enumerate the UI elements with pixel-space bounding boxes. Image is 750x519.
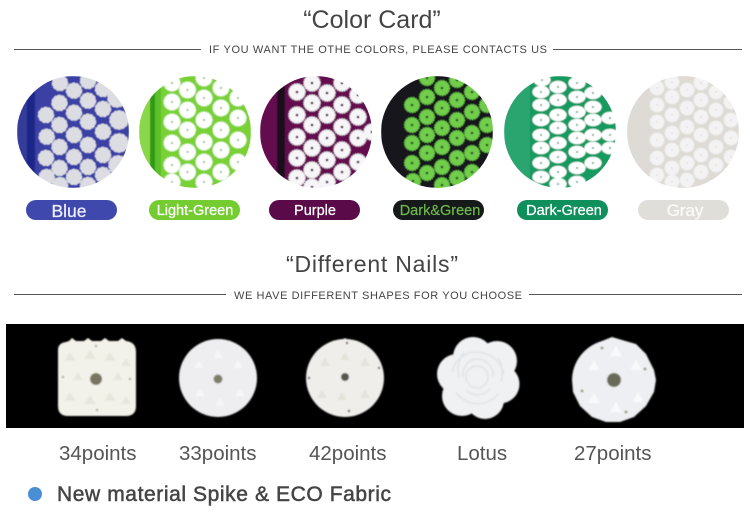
label: Gray: Gray xyxy=(667,201,704,220)
caption: 34points: 34points xyxy=(59,442,137,465)
nail: 33 points round xyxy=(179,339,257,417)
subheading: contact note: IF YOU WANT THE OTHE COLORS, PLEASE CONTACTS US xyxy=(209,44,547,56)
label: Light-Green xyxy=(149,200,240,220)
label: Dark-Green xyxy=(517,200,608,220)
label: Purple: Purple xyxy=(294,203,336,219)
label: Blue xyxy=(26,200,117,221)
label: Gray xyxy=(638,200,729,220)
nail: 27 points round xyxy=(572,337,656,422)
swatch: blue xyxy=(17,73,129,221)
swatch: light green xyxy=(139,70,251,220)
nail: 34 points square xyxy=(58,338,136,416)
caption: 42points: 42points xyxy=(309,442,387,465)
swatch: gray xyxy=(627,75,739,220)
label: Dark&Green: Dark&Green xyxy=(400,203,480,219)
caption: 27points: 27points xyxy=(574,442,652,465)
bullet dot xyxy=(28,487,42,501)
heading: Color Card: “Color Card” xyxy=(303,6,441,34)
label: Light-Green: Light-Green xyxy=(157,203,233,219)
nail: lotus xyxy=(437,337,520,419)
swatch: dark green xyxy=(504,74,619,220)
swatch: purple xyxy=(260,75,380,220)
label: Dark-Green: Dark-Green xyxy=(526,203,602,219)
nail: 42 points round xyxy=(306,338,384,417)
caption: Lotus: Lotus xyxy=(457,442,507,465)
label: Purple xyxy=(269,200,360,220)
panel: nail shapes xyxy=(6,324,744,428)
note: new material: New material Spike & ECO Fabric xyxy=(57,483,391,506)
label: Blue: Blue xyxy=(51,201,87,221)
swatch: dark and green xyxy=(381,71,494,220)
subheading: shapes note: WE HAVE DIFFERENT SHAPES FOR YOU CHOOSE xyxy=(234,290,522,302)
caption: 33points: 33points xyxy=(179,442,257,465)
heading: Different Nails: “Different Nails” xyxy=(286,251,458,277)
